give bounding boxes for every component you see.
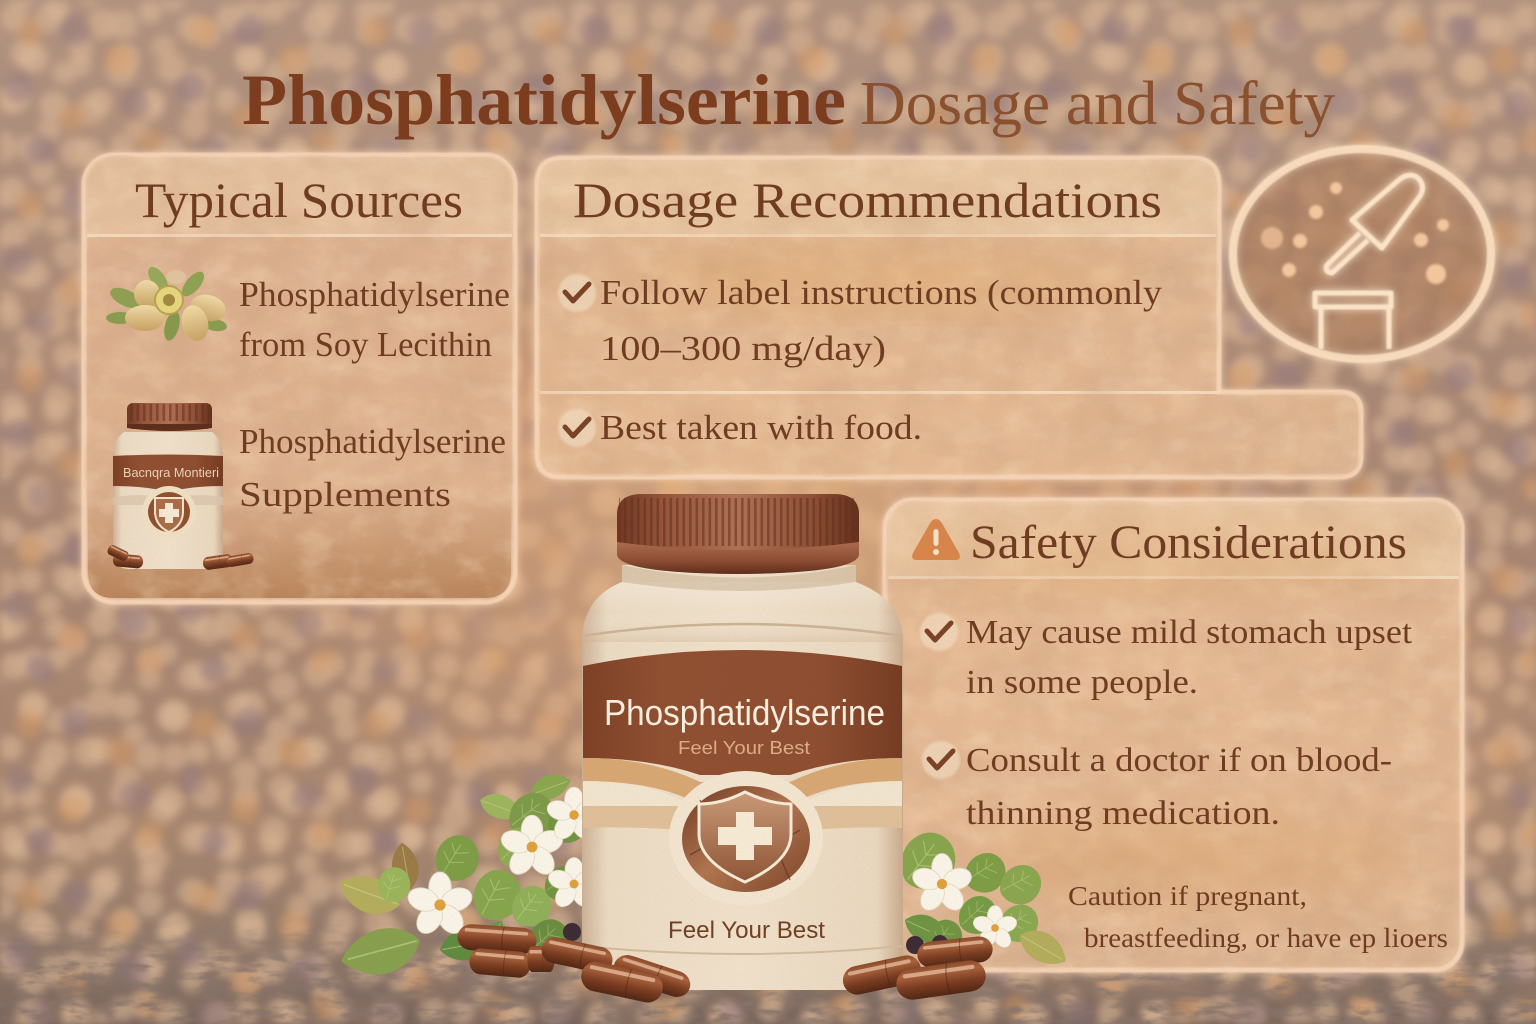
text: with food: Best taken with food.: [600, 408, 922, 447]
text: label instructions: Follow label instructions (commonly: [600, 273, 1163, 312]
heading: dosage recommendations: Dosage Recommendations: [573, 172, 1162, 228]
bottle label: Phosphatidylserine: [604, 692, 885, 733]
icon: warning triangle: [912, 519, 960, 560]
text: supplements source: Supplements: [239, 475, 451, 514]
text: soy lecithin source: Phosphatidylserine: [239, 275, 510, 314]
panel: typical sources: [84, 155, 515, 602]
panel: safety considerations: [885, 500, 1462, 970]
plants: left cluster: [333, 768, 603, 984]
text: blood thinning: thinning medication.: [966, 795, 1280, 832]
text: soy lecithin source: from Soy Lecithin: [239, 325, 492, 364]
bottle label: [583, 650, 902, 830]
title: Dosage and Safety: [860, 70, 1335, 138]
text: blood thinning: Consult a doctor if on blood-: [966, 742, 1392, 779]
text: label instructions: [600, 273, 1163, 368]
text: caution: Caution if pregnant,: [1068, 881, 1307, 911]
title: Phosphatidylserine: [242, 60, 846, 140]
icon: small supplement bottle: Bacnqra Montieri: [123, 466, 219, 480]
text: caution: breastfeeding, or have ep lioers: [1084, 923, 1448, 953]
panel mottled texture: [84, 155, 1462, 970]
bottle cap: [617, 494, 859, 591]
icon: dropper and jar circle: [1233, 149, 1491, 359]
text group: safety: [912, 516, 1448, 953]
supplement bottle: [582, 494, 903, 990]
bottle body: [582, 565, 903, 990]
bottle tagline: Feel Your Best: [668, 917, 825, 944]
text: caution: [1068, 881, 1448, 953]
heading: safety considerations: Safety Considerations: [970, 516, 1407, 569]
text: label instructions: 100–300 mg/day): [600, 329, 886, 368]
bottle label: Feel Your Best: [678, 738, 810, 758]
text: blood thinning: [966, 742, 1392, 832]
text: supplements source: Phosphatidylserine: [239, 422, 506, 461]
heading: typical sources: Typical Sources: [135, 172, 463, 228]
text: stomach upset: in some people.: [966, 664, 1198, 701]
panel: dosage recommendations: [537, 158, 1361, 477]
capsules: left pile: [457, 923, 694, 1005]
text: stomach upset: May cause mild stomach upset: [966, 614, 1413, 651]
icon: soybeans: [106, 264, 229, 344]
text: soy lecithin source: [239, 275, 510, 364]
text group: dosage: [558, 172, 1163, 447]
icon: check 3: [920, 613, 958, 651]
icon: check 1: [558, 274, 596, 312]
icon: small supplement bottle: [106, 403, 254, 571]
icon: check 2: [558, 409, 596, 447]
text: stomach upset: [966, 614, 1413, 701]
icon: check 4: [922, 741, 960, 779]
text group: typical sources: [106, 172, 510, 571]
bottle emblem: [669, 771, 823, 905]
text: supplements source: [239, 422, 506, 514]
capsules: right pile: [840, 935, 994, 1002]
plants: right cluster: [896, 829, 1073, 973]
title: [242, 60, 1335, 140]
